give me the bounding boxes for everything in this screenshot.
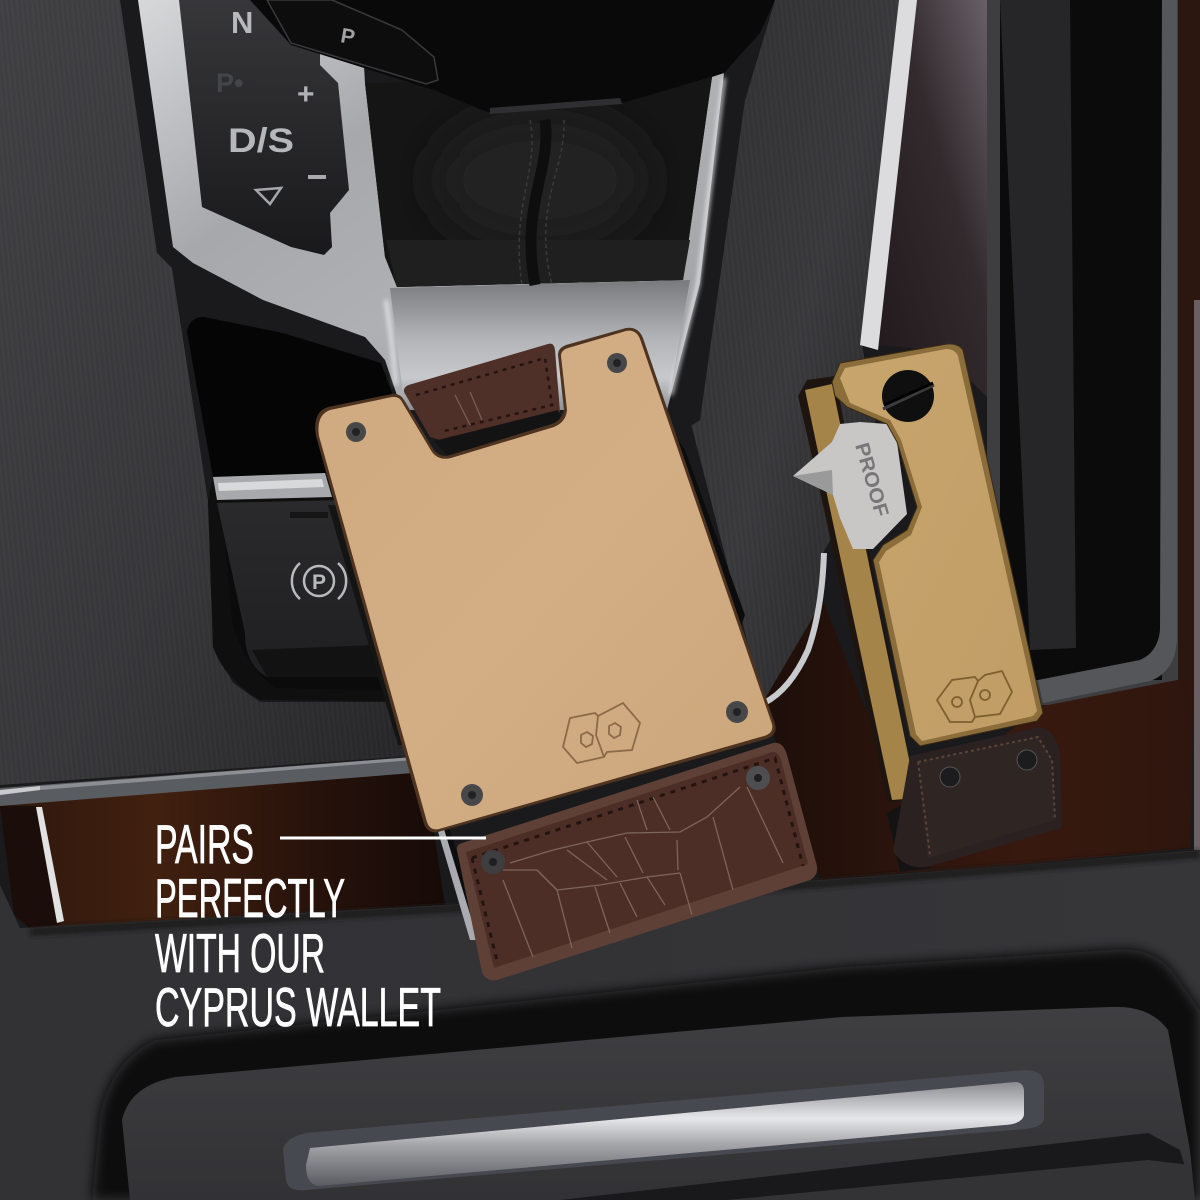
callout line	[280, 836, 486, 840]
key organizer: key	[793, 422, 907, 549]
lower storage panel	[122, 1007, 1195, 1200]
silver highlights	[386, 78, 724, 395]
lower pocket inset	[560, 1133, 1195, 1200]
left silver strip	[0, 757, 420, 807]
lower silver plate	[390, 280, 690, 410]
loop screw left	[940, 767, 960, 787]
brake symbol	[292, 563, 346, 599]
right lower wood	[763, 600, 1194, 880]
dash shadow under wood	[30, 850, 1200, 936]
embossed logo	[563, 703, 640, 763]
P lever	[267, 0, 438, 84]
callout text: WITH OUR	[155, 922, 325, 984]
wallet: tan metal plate	[315, 328, 776, 832]
leather shift boot	[365, 77, 712, 287]
silver trim right	[860, 0, 917, 350]
knob label P: P	[339, 24, 357, 49]
dimmed sport label: P•	[216, 68, 243, 98]
left wood trim	[0, 772, 445, 928]
brake symbol letter: P	[312, 571, 326, 594]
white sliver	[36, 807, 64, 923]
callout text: PERFECTLY	[155, 867, 345, 929]
label minus	[308, 175, 326, 179]
callout text: PAIRS	[155, 813, 254, 875]
label D/S: D/S	[228, 122, 294, 160]
parking recess	[187, 317, 402, 477]
shift mode panel	[179, 0, 349, 255]
plate screw top left	[346, 422, 366, 442]
key organizer: embossed logo	[937, 671, 1012, 722]
loop screw right	[1017, 750, 1037, 770]
black surround of shifter	[120, 0, 775, 600]
boot seams	[519, 120, 564, 285]
parking brake button	[208, 473, 420, 702]
label plus: +	[297, 78, 315, 111]
leather grain	[503, 787, 783, 957]
wallet: top leather pull	[404, 344, 561, 456]
callout text	[155, 813, 441, 1038]
pocket shadow band	[92, 949, 1200, 1200]
plate screw bottom left	[461, 784, 483, 806]
shifter knob	[250, 0, 775, 114]
callout: pairs perfectly with our Cyprus wallet	[155, 813, 486, 1038]
key organizer: slotted screw	[882, 370, 934, 422]
wallet: right elastic band	[665, 420, 745, 640]
curved silver trim	[764, 553, 824, 703]
key engraving: PROOF	[850, 440, 892, 519]
right plum gloss veneer	[870, 0, 990, 400]
callout text: CYPRUS WALLET	[155, 976, 441, 1038]
plate screw bottom right	[726, 701, 748, 723]
plate screw top right	[607, 353, 627, 373]
right edge strip	[1178, 0, 1200, 690]
strap screw right	[746, 766, 770, 790]
left brushed panel	[0, 0, 425, 785]
leather stitching	[472, 758, 803, 965]
wallet: bottom leather strap	[457, 743, 817, 980]
silver shifter trim	[138, 0, 724, 410]
label N: N	[231, 5, 253, 40]
key organizer: rear plate	[798, 376, 917, 802]
wallet: left elastic band	[328, 505, 425, 745]
right storage tray	[987, 0, 1180, 705]
center brushed panel	[690, 0, 902, 702]
dashboard leather	[0, 850, 1200, 1200]
key organizer: front plate	[832, 344, 1043, 746]
key organizer: leather loop	[887, 727, 1062, 872]
triangle icon	[256, 188, 281, 204]
wallet: silver inner edge	[413, 747, 478, 940]
strap screw left	[481, 850, 505, 874]
silver handle	[283, 1070, 1044, 1190]
